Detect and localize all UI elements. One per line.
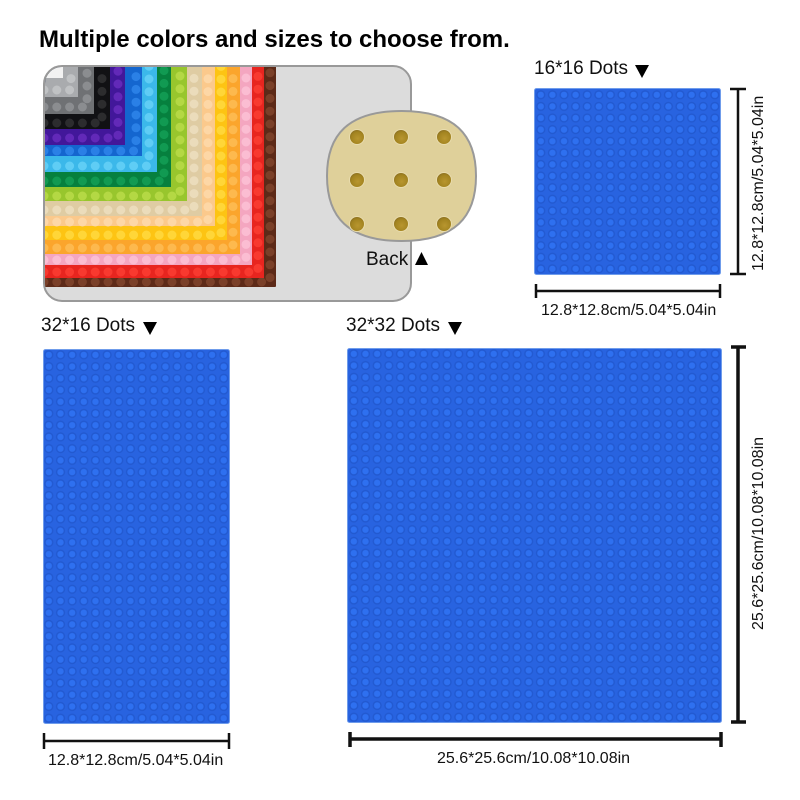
height dimension: 16*16: 12.8*12.8cm/5.04*5.04in: [750, 96, 767, 271]
height dimension: 32*32: [731, 347, 767, 722]
heading: 16*16 dots: 16*16 Dots: [534, 58, 628, 79]
plate: 32*16: [44, 350, 230, 724]
heading: 32*32 dots: 32*32 Dots: [346, 315, 440, 336]
plate: 16*16: [534, 88, 720, 274]
title: Multiple colors and sizes to choose from.: [39, 26, 510, 53]
back view detail: [327, 111, 476, 241]
plate: 32*32: [348, 348, 722, 722]
width dimension: 16*16: [536, 284, 720, 319]
dimples: [350, 130, 452, 232]
stacked colored plates: [44, 66, 276, 287]
back label: [366, 249, 428, 270]
heading: 32*16 dots: 32*16 Dots: [41, 315, 135, 336]
height dimension: 16*16: [730, 88, 767, 274]
height dimension: 32*32: 25.6*25.6cm/10.08*10.08in: [750, 437, 767, 630]
width dimension: 16*16: 12.8*12.8cm/5.04*5.04in: [541, 302, 716, 319]
width dimension: 32*32: 25.6*25.6cm/10.08*10.08in: [437, 750, 630, 767]
width dimension: 32*32: [350, 732, 721, 767]
back label: Back: [366, 249, 409, 270]
panel: color range: [44, 66, 411, 301]
width dimension: 32*16: 12.8*12.8cm/5.04*5.04in: [48, 752, 223, 769]
width dimension: 32*16: [44, 733, 229, 769]
